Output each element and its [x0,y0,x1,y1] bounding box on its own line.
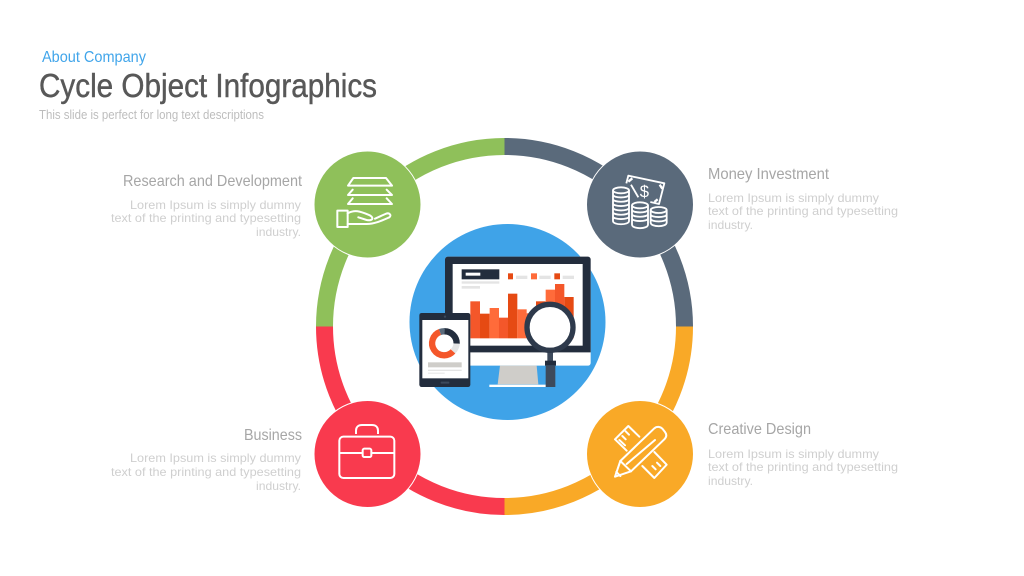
description: text of the printing and typesetting [708,204,898,218]
description: industry. [256,479,301,493]
heading: Business [244,427,302,444]
node: Business [111,400,421,508]
yellow circle [586,400,694,508]
subtitle: This slide is perfect for long text descriptions [39,107,264,122]
coin stack: middle [632,202,648,228]
blue backdrop circle [410,224,606,420]
description: text of the printing and typesetting [111,465,301,479]
central illustration: dashboard on monitor and tablet [410,224,606,420]
heading: Research and Development [123,173,302,190]
description: Lorem Ipsum is simply dummy [130,451,301,465]
tablet [419,313,470,387]
icon: stacked sheets on an open hand [337,178,392,227]
node: Creative Design [586,400,898,508]
description: industry. [708,474,753,488]
heading: Money Investment [708,166,830,183]
description [111,451,301,493]
node: Research and Development [111,151,421,258]
coin stack: short [651,207,667,226]
red circle [314,400,421,508]
node: Money Investment [586,151,898,258]
description: Lorem Ipsum is simply dummy [708,191,879,205]
green circle [314,151,421,258]
pencil [615,427,666,477]
donut chart [432,331,457,355]
monitor [445,257,591,387]
heading: Creative Design [708,421,811,438]
ring segment: green [324,146,504,326]
magnifying glass [527,304,573,387]
description: Lorem Ipsum is simply dummy [708,447,879,461]
ring segment: yellow [504,326,684,506]
title: Cycle Object Infographics [39,67,377,104]
ring segment: slate [504,146,684,326]
description [111,198,301,239]
description: Lorem Ipsum is simply dummy [130,198,301,212]
description: industry. [708,218,753,232]
slate circle [586,151,694,258]
icon: pencil and ruler [615,426,667,478]
coin stack: tall [613,187,629,224]
description: text of the printing and typesetting [708,460,898,474]
ring segment: red [324,326,504,506]
eyebrow: About Company: About Company [42,49,146,66]
icon: briefcase [339,425,394,478]
description [708,191,898,232]
icon: coins and banknote: $ [640,182,649,201]
description [708,447,898,488]
icon: coins and banknote [613,176,667,228]
description: text of the printing and typesetting [111,211,301,225]
bar chart [470,284,574,338]
description: industry. [256,225,301,239]
cycle ring [324,146,684,506]
ruler [615,426,639,451]
